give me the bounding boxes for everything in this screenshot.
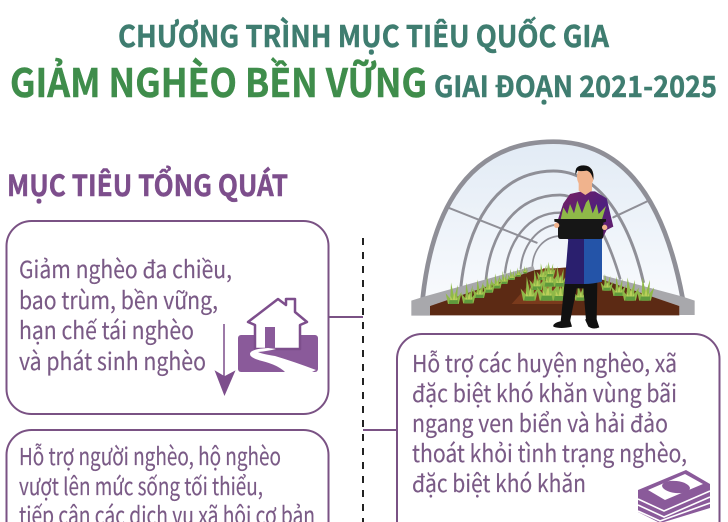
tray	[554, 219, 606, 239]
illustration: greenhouse with farmer	[411, 142, 695, 329]
panel: objective 3: ngang ven biển và hải đảo	[412, 405, 668, 439]
center bed	[512, 268, 567, 304]
hair	[575, 165, 593, 180]
title: CHƯƠNG TRÌNH MỤC TIÊU QUỐC GIA	[118, 12, 610, 56]
dashed center line	[362, 238, 364, 522]
concrete base	[411, 266, 695, 316]
soil	[430, 267, 679, 315]
shirt	[557, 191, 613, 240]
panel: objective 3	[397, 334, 720, 522]
connector right	[363, 429, 397, 431]
greenhouse glass	[423, 142, 683, 298]
connector left	[329, 316, 363, 318]
panel: objective 3: đặc biệt khó khăn	[412, 465, 586, 499]
panel: objective 1: và phát sinh nghèo	[19, 343, 206, 377]
greenhouse arches	[423, 142, 683, 298]
panel: objective 2: Hỗ trợ người nghèo, hộ nghèo	[19, 438, 281, 472]
apron	[565, 238, 584, 284]
neck and face	[579, 178, 592, 195]
heading: general objectives: MỤC TIÊU TỔNG QUÁT	[7, 163, 288, 205]
panel: objective 1: hạn chế tái nghèo	[19, 312, 194, 346]
icon: money stack	[638, 470, 710, 522]
farmer	[553, 165, 613, 329]
shoes	[553, 319, 599, 329]
panel: objective 3: thoát khỏi tình trạng nghèo,	[412, 435, 687, 469]
panel: objective 3: đặc biệt khó khăn vùng bãi	[412, 375, 677, 409]
panel: objective 1: bao trùm, bền vững,	[19, 282, 218, 316]
panel: objective 1	[6, 221, 328, 414]
plants in tray	[561, 199, 606, 219]
panel: objective 2	[6, 430, 328, 522]
plants	[446, 262, 654, 304]
hands	[554, 223, 559, 228]
panel: objective 2: vượt lên mức sống tối thiểu,	[19, 468, 263, 502]
trousers	[561, 282, 597, 322]
title	[10, 12, 717, 109]
panel: objective 1: Giảm nghèo đa chiều,	[19, 251, 232, 285]
icon: house with path	[238, 299, 318, 372]
panel: objective 3: Hỗ trợ các huyện nghèo, xã	[412, 345, 677, 379]
icon: down arrow	[216, 324, 234, 394]
title: GIẢM NGHÈO BỀN VỮNG	[10, 53, 427, 109]
